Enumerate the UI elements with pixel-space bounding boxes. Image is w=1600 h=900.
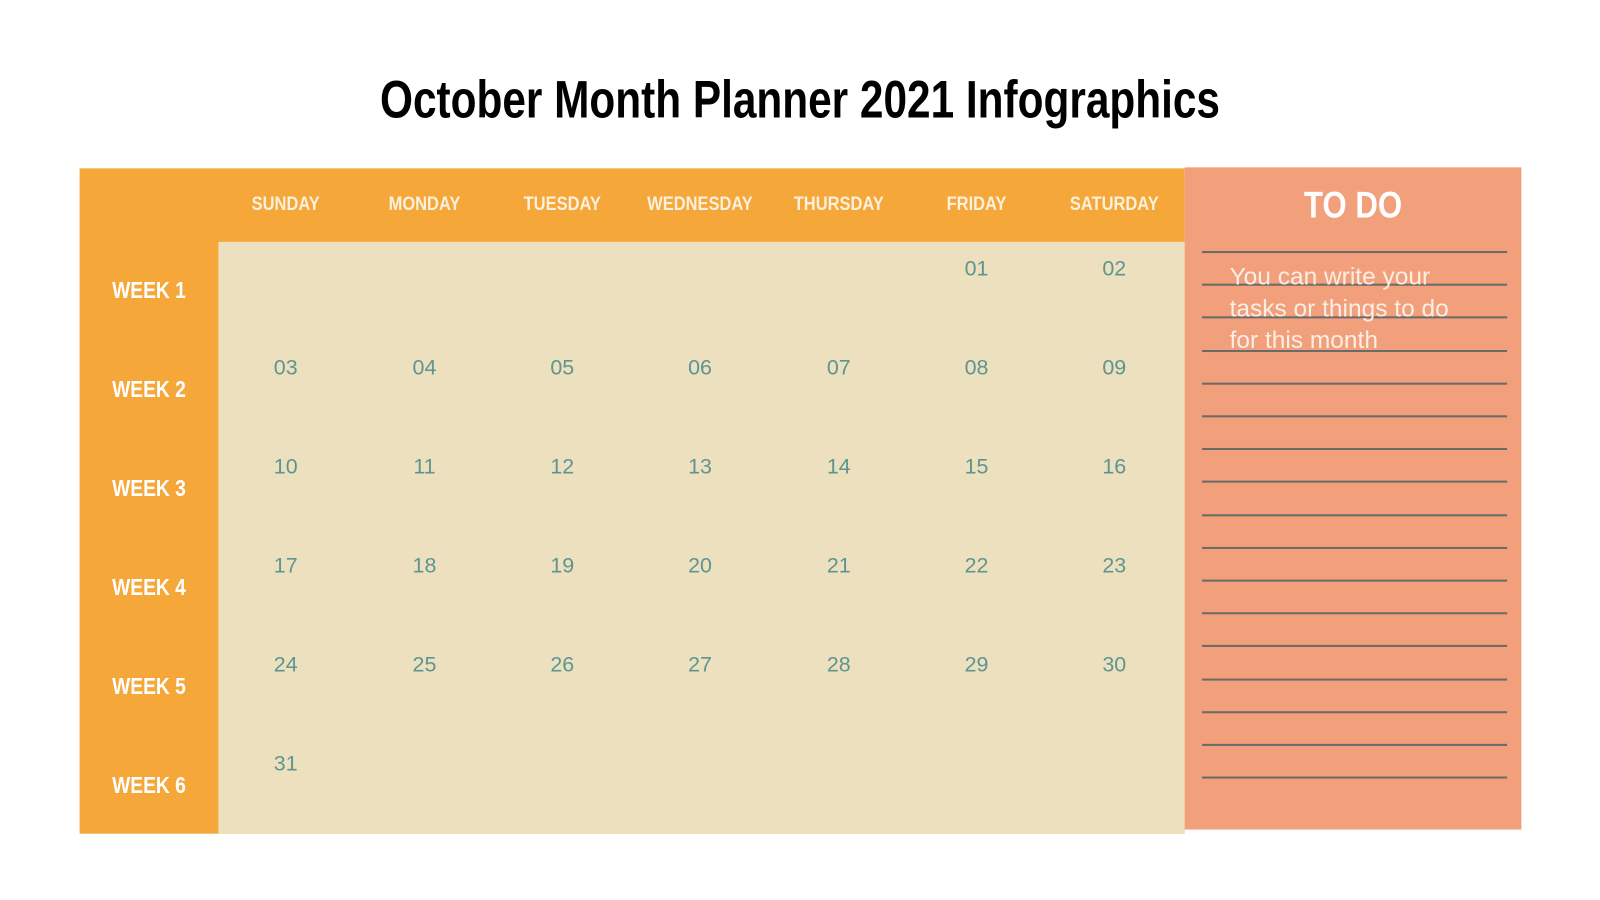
title: October Month Planner 2021 Infographics: [380, 70, 1220, 130]
week labels: [112, 277, 186, 798]
week labels: WEEK 3: [112, 474, 186, 501]
day numbers: 02: [1102, 257, 1126, 281]
day numbers: 11: [413, 455, 436, 479]
to do heading: TO DO: [1304, 184, 1402, 226]
day numbers: 16: [1102, 455, 1126, 479]
day numbers: 25: [413, 653, 436, 677]
calendar panel: [80, 168, 1185, 834]
to do text: You can write your tasks or things to do for this month: [1230, 263, 1449, 354]
day numbers: 18: [413, 554, 436, 578]
day numbers: 09: [1102, 356, 1126, 380]
day numbers: 14: [827, 455, 851, 479]
day headers: SATURDAY: [1070, 194, 1159, 215]
day numbers: 13: [688, 455, 712, 479]
week labels: WEEK 6: [112, 771, 186, 798]
day numbers: 01: [965, 257, 988, 281]
day numbers: 12: [550, 455, 574, 479]
day headers: WEDNESDAY: [647, 194, 753, 215]
day numbers: 19: [550, 554, 574, 578]
day numbers: 15: [965, 455, 988, 479]
day headers: SUNDAY: [252, 194, 320, 215]
calendar grid background: [218, 242, 1185, 834]
panel: to do: [1185, 167, 1521, 830]
day numbers: 22: [965, 554, 988, 578]
day numbers: 28: [827, 653, 851, 677]
day headers: [252, 194, 1159, 215]
week labels: WEEK 4: [112, 573, 186, 600]
day headers: THURSDAY: [794, 194, 884, 215]
day numbers: 29: [965, 653, 988, 677]
week labels: WEEK 2: [112, 376, 186, 402]
day numbers: 08: [965, 356, 988, 380]
day numbers: 04: [413, 356, 436, 380]
day numbers: 27: [688, 653, 712, 677]
day numbers: 17: [274, 554, 298, 578]
day numbers: 03: [274, 356, 298, 380]
day numbers: 10: [274, 455, 298, 479]
day numbers: 21: [827, 554, 851, 578]
to do lines: [1202, 251, 1508, 779]
day headers: FRIDAY: [947, 194, 1006, 215]
week labels: WEEK 5: [112, 672, 186, 699]
day numbers: 07: [827, 356, 851, 380]
day numbers: 23: [1102, 554, 1126, 578]
day headers: MONDAY: [389, 194, 460, 215]
day numbers: 20: [688, 554, 712, 578]
day numbers: 30: [1102, 653, 1126, 677]
day headers: TUESDAY: [524, 194, 601, 215]
week labels: WEEK 1: [112, 277, 186, 303]
day numbers: [274, 257, 1126, 776]
day numbers: 24: [274, 653, 298, 677]
day numbers: 31: [274, 752, 298, 776]
day numbers: 06: [688, 356, 712, 380]
day numbers: 26: [550, 653, 574, 677]
day numbers: 05: [550, 356, 574, 380]
